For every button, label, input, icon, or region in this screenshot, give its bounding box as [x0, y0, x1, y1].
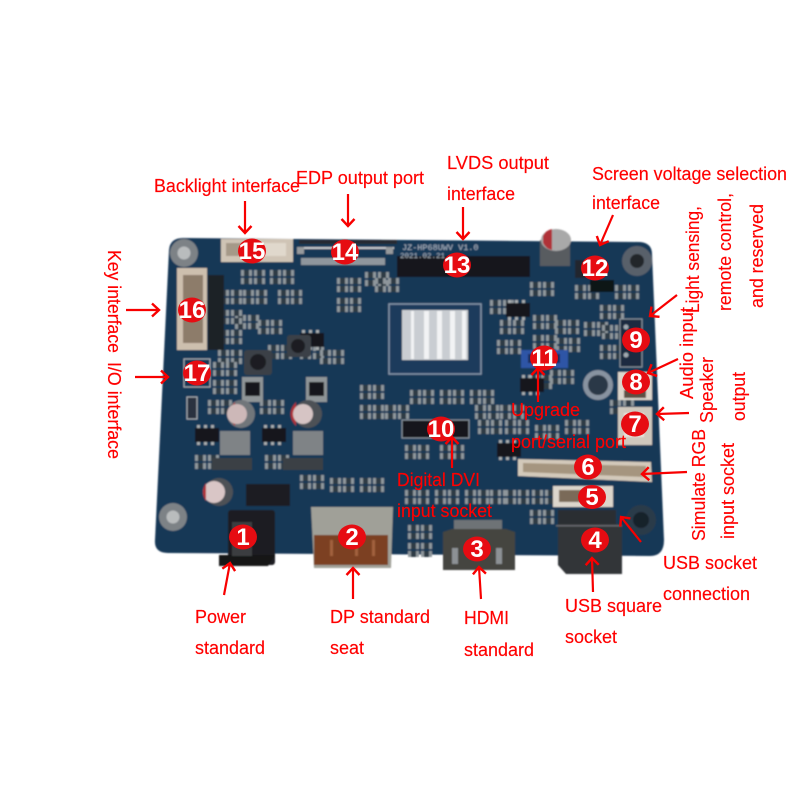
label: light sensing vertical: remote control, [715, 193, 735, 311]
badge 1: 1 [236, 524, 250, 551]
arrow: upgrade [537, 368, 539, 402]
badge 12: 12 [582, 255, 608, 282]
label: LVDS: interface [447, 184, 515, 204]
badge 4: 4 [588, 527, 602, 554]
label: screen voltage: interface [592, 193, 660, 213]
connector 5 [553, 486, 613, 507]
connector 16 keys [177, 268, 224, 350]
label: USB socket: USB socket [663, 553, 757, 573]
arrow: keys [126, 309, 159, 311]
arrows [126, 194, 689, 599]
label: USB square: socket [565, 627, 617, 647]
badge 14: 14 [332, 239, 359, 266]
label: USB square: USB square [565, 596, 662, 616]
badge 4 [581, 527, 609, 554]
badge 3: 3 [470, 536, 484, 563]
label: light sensing vertical: Light sensing, [683, 206, 703, 313]
badge 1 [229, 524, 257, 551]
label: HDMI: standard [464, 640, 534, 660]
arrow: LVDS [462, 207, 464, 239]
arrow: USB square [592, 558, 593, 592]
header 13 LVDS [397, 243, 530, 277]
label: upgrade [511, 400, 626, 452]
badge 5: 5 [585, 484, 599, 511]
labels [104, 153, 787, 660]
connector 15 backlight [221, 239, 293, 262]
USB square connector 4 [556, 510, 622, 574]
label: DP [330, 607, 430, 658]
label: DP: seat [330, 638, 364, 658]
arrow: backlight [244, 201, 246, 233]
badge 8 [622, 369, 650, 396]
arrow: RGB [642, 472, 687, 474]
header 17 I/O [184, 359, 210, 419]
label: LVDS: LVDS output [447, 153, 549, 173]
badge 5 [578, 484, 606, 511]
badge 2 [338, 524, 366, 551]
badge 7: 7 [628, 411, 642, 438]
label: RGB vertical: input socket [718, 443, 738, 539]
badge 13: 13 [444, 252, 470, 279]
DP connector 2 [311, 507, 393, 568]
label: keys vertical: Key interface [104, 250, 124, 353]
label: I/O vertical: I/O interface [104, 362, 124, 459]
label: LVDS [447, 153, 549, 204]
label: power [195, 607, 265, 658]
arrow: DP [352, 568, 354, 599]
connector 7 [618, 407, 652, 445]
connector 8 [618, 372, 652, 400]
arrow: speaker [657, 413, 689, 414]
badge 3 [463, 536, 491, 563]
label: HDMI [464, 608, 534, 660]
connector 6 RGB [518, 459, 652, 482]
badge 9: 9 [629, 327, 643, 354]
label: DVI: input socket [397, 501, 492, 521]
badge 2: 2 [345, 524, 359, 551]
badge 6 [574, 454, 602, 481]
badge 6: 6 [581, 454, 595, 481]
red capacitors [203, 400, 322, 506]
label: screen voltage: Screen voltage selection [592, 164, 787, 184]
label: power: standard [195, 638, 265, 658]
header 13 LVDS: 2021.02.21 [400, 253, 446, 261]
arrow: USB socket connection [621, 517, 641, 542]
header 10 DVI [402, 420, 469, 438]
power jack 1 [219, 510, 275, 566]
circuit board photo [155, 229, 664, 574]
label: light sensing vertical: and reserved [747, 204, 767, 308]
label: upgrade: Upgrade [511, 400, 580, 420]
label: screen voltage [592, 164, 787, 213]
arrow: HDMI [479, 567, 481, 599]
label: speaker vertical: Speaker [697, 357, 717, 423]
connector 9 [620, 319, 642, 367]
label: eDP: EDP output port [296, 168, 424, 188]
label: RGB vertical: Simulate RGB [689, 429, 709, 541]
number badges [178, 238, 650, 563]
arrow: DVI [451, 437, 453, 468]
arrow: power [224, 563, 230, 595]
label: backlight: Backlight interface [154, 176, 300, 196]
arrow: light sensing [650, 295, 677, 316]
label: HDMI: HDMI [464, 608, 509, 628]
label: DVI: Digital DVI [397, 470, 480, 490]
label: power: Power [195, 607, 246, 627]
electrolytic capacitor top [540, 229, 571, 266]
mounting holes [159, 239, 656, 535]
connector 12 voltage selection [575, 260, 614, 292]
label: audio input vertical: Audio input [677, 307, 697, 399]
heatsink with chip frame [389, 304, 481, 374]
header 13 LVDS: JZ-HP68UWV V1.0 [402, 243, 479, 253]
arrow: eDP [347, 194, 349, 226]
arrow: audio input [648, 359, 678, 373]
badge 15: 15 [239, 238, 265, 265]
label: USB socket: connection [663, 584, 750, 604]
small components [195, 270, 639, 557]
board substrate [155, 238, 664, 556]
badge 11: 11 [531, 345, 557, 372]
label: RGB vertical [689, 429, 738, 541]
badge 10: 10 [428, 416, 454, 443]
label: USB socket [663, 553, 757, 604]
badge 7 [621, 411, 649, 438]
label: USB square [565, 596, 662, 647]
badge 9 [622, 327, 650, 354]
header 11 serial blue [521, 350, 568, 368]
arrow: screen voltage [600, 215, 613, 245]
HDMI connector 3 [443, 520, 515, 570]
label: speaker vertical [697, 357, 749, 423]
badge 16: 16 [179, 297, 205, 324]
badge 8: 8 [629, 369, 643, 396]
label: upgrade: port/serial port [511, 432, 626, 452]
label: speaker vertical: output [729, 372, 749, 421]
arrow: I/O [135, 376, 168, 378]
label: light sensing vertical [683, 193, 767, 313]
label: DVI [397, 470, 492, 521]
label: DP: DP standard [330, 607, 430, 627]
connector 14 eDP [297, 240, 397, 265]
badge 17: 17 [184, 360, 210, 387]
